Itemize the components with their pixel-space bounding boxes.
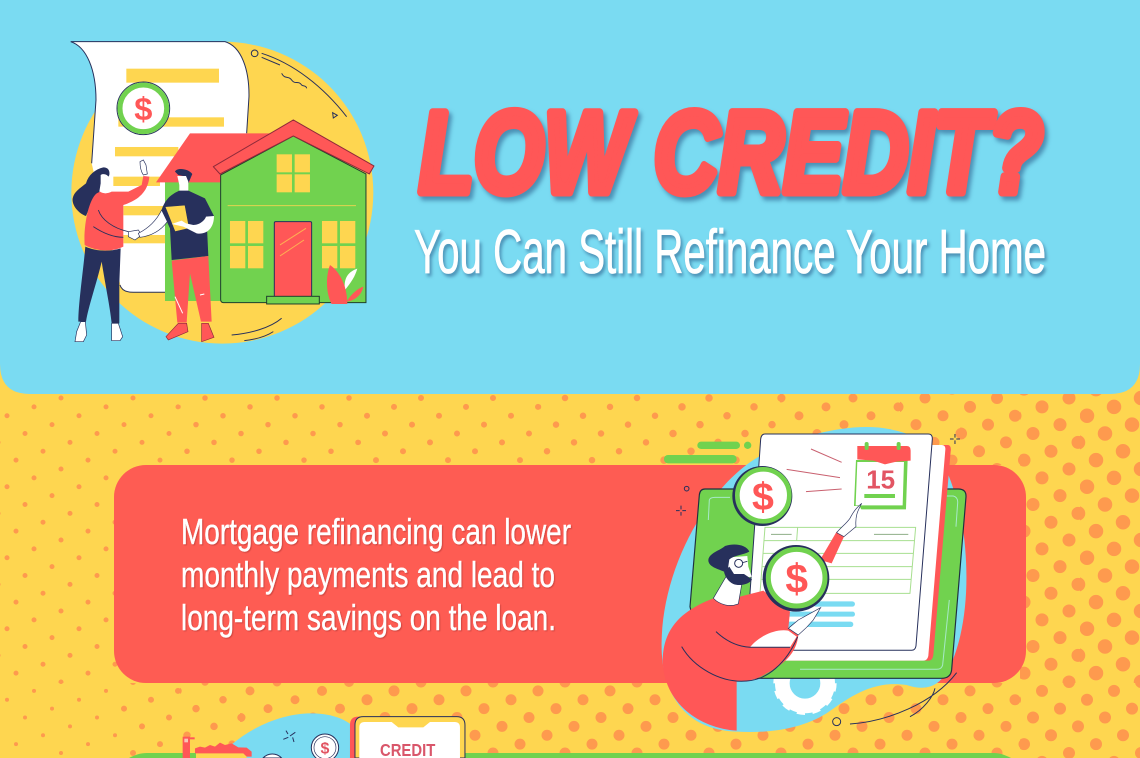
body text: Mortgage refinancing can lower xyxy=(181,511,571,552)
white middle sheet xyxy=(750,445,945,661)
blue blob backdrop xyxy=(662,427,966,732)
gear xyxy=(776,654,834,713)
upper coin xyxy=(732,466,792,526)
upper coin: $ xyxy=(752,475,774,519)
woman xyxy=(73,160,149,342)
body text: long-term savings on the loan. xyxy=(181,597,556,638)
door xyxy=(274,222,312,297)
yellow circle backdrop xyxy=(71,42,373,344)
body text xyxy=(181,511,571,638)
coin: $ xyxy=(321,740,330,757)
blue header panel xyxy=(0,0,1140,394)
illustration: man with document, calendar and coins xyxy=(662,427,966,732)
green dashes xyxy=(664,442,751,463)
lower coin: $ xyxy=(785,556,808,602)
green folder xyxy=(690,489,966,678)
sparkle xyxy=(283,731,295,742)
red back sheet xyxy=(773,445,951,661)
plant xyxy=(327,265,363,304)
dollar coin on bill xyxy=(117,82,170,135)
credit card xyxy=(350,717,465,758)
illustration: house and paper bill xyxy=(71,42,374,344)
decorative lines xyxy=(232,50,347,341)
red info panel xyxy=(114,465,1026,683)
blue text lines xyxy=(767,601,855,627)
blue blob xyxy=(220,713,352,758)
decorative marks xyxy=(676,434,960,726)
illustration: credit card, coins and crane xyxy=(183,713,465,758)
body text: monthly payments and lead to xyxy=(181,554,555,595)
man xyxy=(138,169,214,342)
green panel (next section) xyxy=(129,753,1011,758)
paper bill xyxy=(71,42,249,292)
house front xyxy=(213,120,374,304)
dollar coin on bill: $ xyxy=(134,90,152,127)
bill text bars xyxy=(113,69,224,243)
red crane xyxy=(183,737,252,758)
lower coin xyxy=(763,545,829,612)
front sheet xyxy=(750,434,932,650)
coin xyxy=(311,734,339,758)
red rays xyxy=(787,449,842,492)
man xyxy=(663,503,862,731)
table on sheet xyxy=(760,527,916,593)
second coin xyxy=(263,754,282,758)
back house wing xyxy=(156,133,270,301)
calendar xyxy=(854,442,911,509)
yellow cargo under crane arm xyxy=(196,752,247,758)
calendar: 15 xyxy=(866,464,895,494)
illustration: couple shaking hands xyxy=(73,160,214,342)
